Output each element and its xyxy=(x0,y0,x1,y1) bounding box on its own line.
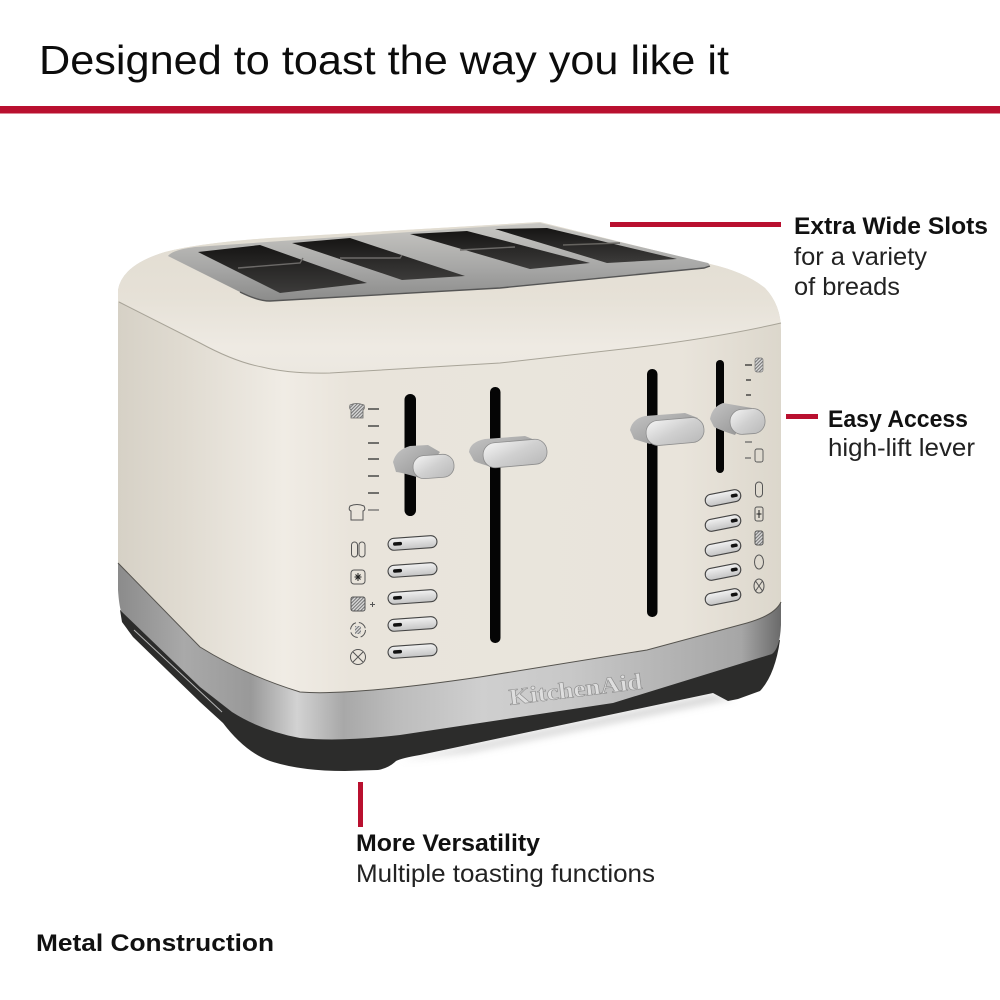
icon: light toast xyxy=(349,504,365,520)
icon: right light toast xyxy=(755,449,763,462)
lever 3 xyxy=(630,413,705,446)
callout: extra wide slots xyxy=(610,213,988,301)
callout: more versatility: Multiple toasting functions xyxy=(356,860,655,888)
lever 1 xyxy=(393,445,455,479)
callout: extra wide slots: of breads xyxy=(794,273,900,301)
icon: right dark toast xyxy=(755,358,763,372)
toaster illustration xyxy=(118,222,781,771)
header divider xyxy=(0,106,1000,114)
right browning scale xyxy=(745,365,752,458)
lid xyxy=(118,222,781,373)
left function icons xyxy=(350,542,375,664)
slot 1 xyxy=(198,245,367,293)
callout text: Extra Wide Slots xyxy=(794,213,988,240)
callout text: More Versatility xyxy=(356,830,541,857)
callout: extra wide slots: for a variety xyxy=(794,243,928,271)
ground shadow xyxy=(400,694,735,760)
slider tracks xyxy=(404,360,724,643)
lever 4 xyxy=(710,403,766,435)
leader line xyxy=(786,414,818,419)
right buttons xyxy=(704,489,742,606)
black base xyxy=(120,610,780,771)
title: Designed to toast the way you like it xyxy=(39,37,730,83)
lid seam xyxy=(119,302,781,373)
cream body xyxy=(118,222,781,693)
base highlight strip xyxy=(134,630,222,712)
lever 2 xyxy=(469,436,548,469)
left browning scale xyxy=(368,409,379,510)
top plate xyxy=(168,223,709,301)
callout: more versatility xyxy=(356,782,655,888)
metal band xyxy=(118,562,781,739)
leader line xyxy=(358,782,363,827)
slot 3 xyxy=(410,231,590,269)
callout: easy access xyxy=(786,406,975,462)
slot 2 xyxy=(292,238,465,280)
left buttons xyxy=(388,535,437,659)
leader line xyxy=(610,222,781,227)
right function icons xyxy=(754,482,764,593)
body seam to metal xyxy=(118,563,781,693)
slots xyxy=(198,228,677,293)
brand logo: KitchenAid xyxy=(508,669,644,710)
footer label: Metal Construction xyxy=(36,930,274,957)
callout: easy access: high-lift lever xyxy=(828,434,975,462)
callout text: Easy Access xyxy=(828,406,968,433)
slot 4 xyxy=(495,228,677,263)
icon: dark toast xyxy=(350,404,364,418)
